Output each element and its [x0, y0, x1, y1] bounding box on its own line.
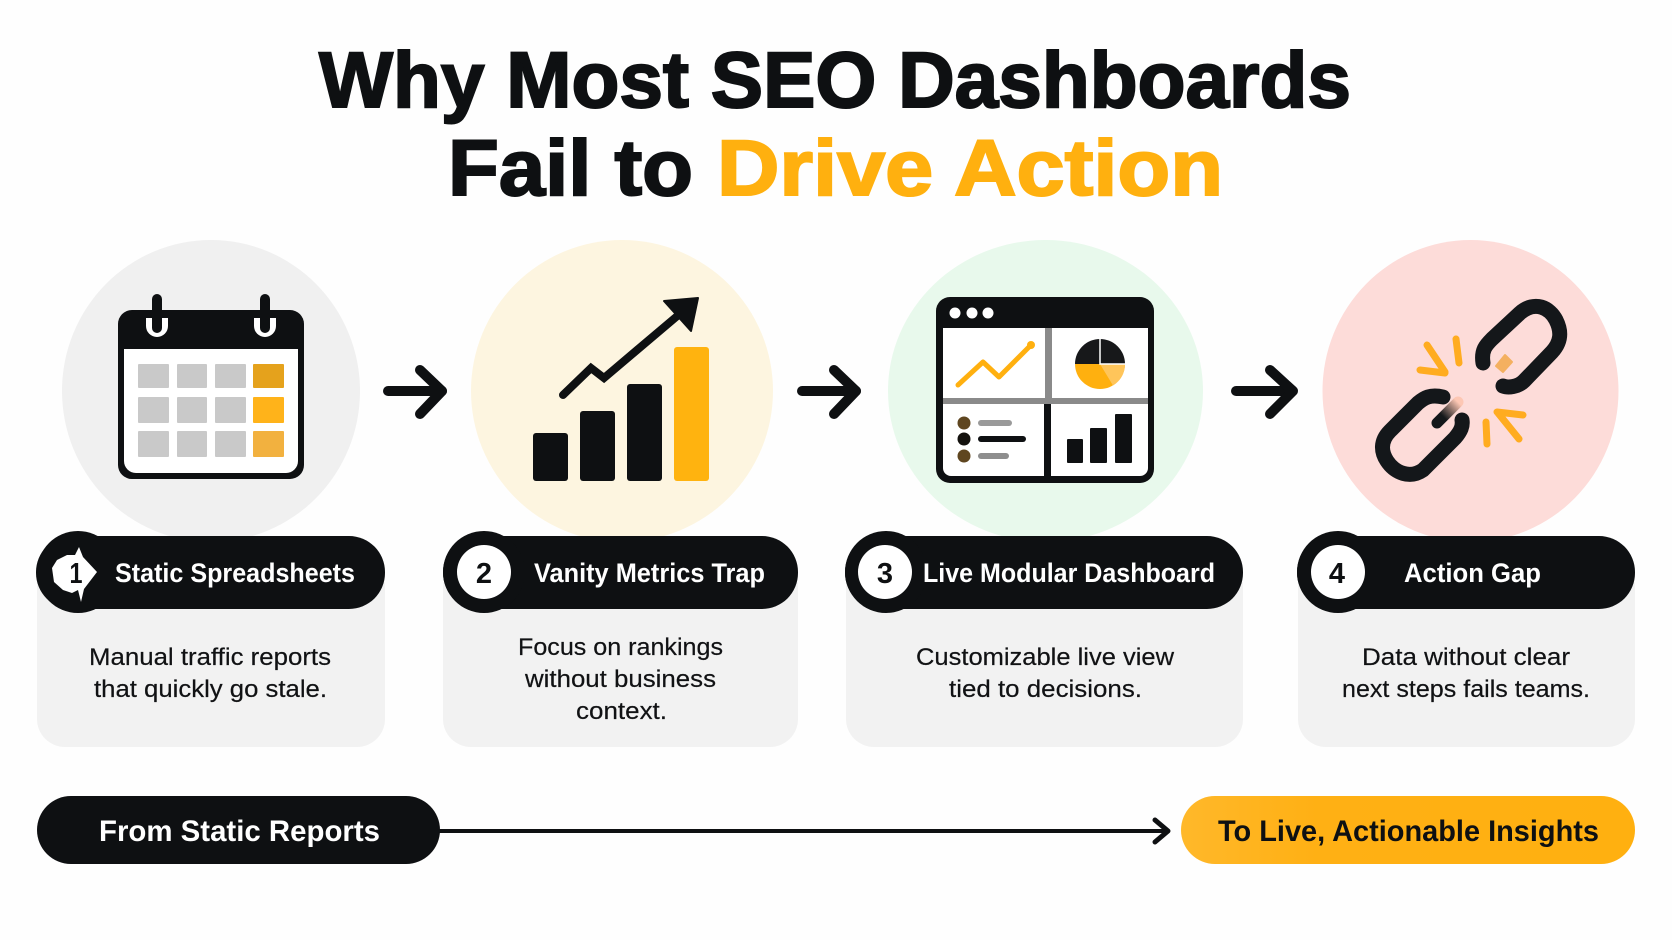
- from pill: [37, 796, 440, 864]
- description 3: [916, 644, 1175, 703]
- to pill: To Live, Actionable Insights: [1218, 815, 1599, 848]
- title: Drive Action: [717, 123, 1223, 212]
- title: Why Most SEO Dashboards: [319, 35, 1351, 124]
- description 2: context.: [576, 698, 667, 725]
- description 2: without business: [524, 666, 716, 693]
- icon background circle 3: [888, 240, 1203, 542]
- header pill 3: [845, 531, 1243, 613]
- from pill: From Static Reports: [99, 815, 380, 848]
- icon background circle 4: [1322, 240, 1618, 542]
- panel: step 4 action gap: [1297, 240, 1635, 747]
- icon: broken chain link: [1382, 306, 1560, 474]
- description 4: Data without clear: [1362, 644, 1570, 671]
- card 3: [846, 560, 1243, 747]
- to pill: [1181, 796, 1635, 864]
- icon: calendar: [118, 294, 304, 479]
- description 3: Customizable live view: [916, 644, 1175, 671]
- card 2: [443, 560, 798, 747]
- title: [319, 35, 1351, 212]
- panel: step 3 live modular dashboard: [845, 240, 1243, 747]
- progress arrow line: [438, 820, 1168, 842]
- description 1: [89, 644, 331, 703]
- header pill 1: [36, 531, 385, 613]
- description 3: tied to decisions.: [949, 676, 1142, 703]
- title: Fail to: [448, 123, 693, 212]
- arrow: step 1 to 2: [388, 370, 442, 414]
- icon background circle 2: [471, 240, 773, 542]
- panel: step 2 vanity metrics trap: [443, 240, 798, 747]
- description 4: next steps fails teams.: [1342, 676, 1590, 703]
- description 2: [518, 634, 723, 725]
- icon: dashboard window: [936, 297, 1154, 483]
- header pill 2: Vanity Metrics Trap: [534, 558, 765, 588]
- header pill 1: 1: [70, 558, 82, 590]
- description 2: Focus on rankings: [518, 634, 723, 661]
- header pill 4: [1297, 531, 1635, 613]
- card 1: [37, 560, 385, 747]
- description 1: Manual traffic reports: [89, 644, 331, 671]
- header pill 1: Static Spreadsheets: [115, 558, 355, 588]
- header pill 3: 3: [877, 558, 893, 590]
- panel: step 1 static spreadsheets: [36, 240, 385, 747]
- header pill 2: [443, 531, 798, 613]
- description 1: that quickly go stale.: [94, 676, 327, 703]
- header pill 4: Action Gap: [1404, 558, 1541, 588]
- icon: rising bar chart: [533, 298, 709, 481]
- header pill 4: 4: [1329, 558, 1345, 590]
- arrow: step 2 to 3: [802, 370, 856, 414]
- description 4: [1342, 644, 1590, 703]
- header pill 3: Live Modular Dashboard: [923, 558, 1215, 588]
- card 4: [1298, 560, 1635, 747]
- icon background circle 1: [62, 240, 360, 542]
- header pill 2: 2: [476, 558, 492, 590]
- arrow: step 3 to 4: [1236, 370, 1293, 414]
